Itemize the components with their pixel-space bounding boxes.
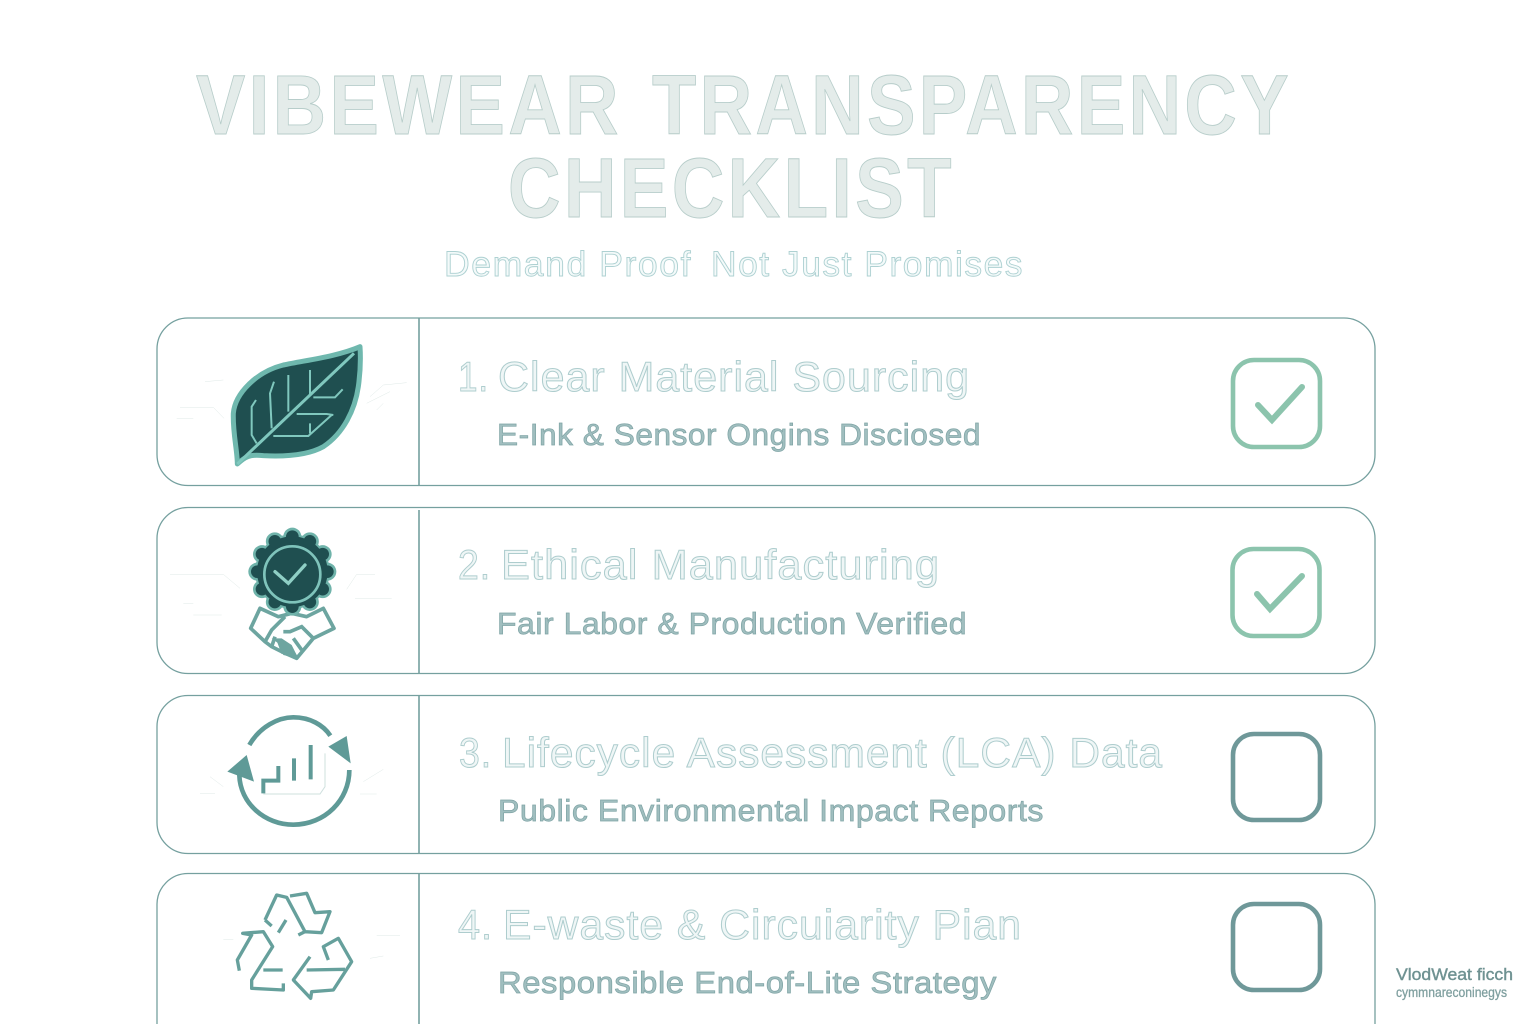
item 4 heading: E-waste & Circuiarity Pian: [503, 901, 1022, 948]
item 2 heading: Ethical Manufacturing: [501, 541, 940, 588]
checkbox: empty: [1233, 734, 1320, 820]
item 1 description: E-Ink & Sensor Ongins Disciosed: [497, 417, 981, 452]
title: [196, 58, 1292, 235]
footer brand note: VlodWeat ficch: [1396, 965, 1513, 984]
panel: item 4 e-waste and circularity: [157, 873, 1375, 1024]
icon: lifecycle chart: [200, 717, 383, 825]
panel: item 1 clear material sourcing: [157, 318, 1375, 486]
title: TRANSPARENCY: [652, 58, 1292, 152]
icon: circuit leaf: [177, 347, 407, 464]
subtitle: Demand Proof: [444, 245, 692, 284]
item 3 description: Public Environmental Impact Reports: [498, 793, 1044, 828]
item 4 heading: 4.: [458, 901, 493, 948]
footer brand note: cymmnareconinegys: [1396, 984, 1507, 1000]
item 1 heading: 1.: [458, 353, 489, 400]
title: VIBEWEAR: [196, 58, 622, 152]
panel: item 3 lifecycle assessment: [157, 695, 1375, 854]
checkbox: empty: [1233, 904, 1320, 990]
item 3 heading: Lifecycle Assessment (LCA) Data: [502, 729, 1163, 776]
checkbox: checked: [1233, 360, 1320, 447]
item 1 heading: Clear Material Sourcing: [498, 353, 970, 400]
checkbox: checked: [1232, 549, 1320, 636]
item 2 description: Fair Labor & Production Verified: [497, 606, 967, 641]
title: CHECKLIST: [508, 141, 955, 235]
item 2 heading: 2.: [458, 541, 491, 588]
icon: recycle arrows: [223, 893, 400, 998]
item 4 description: Responsible End-of-Lite Strategy: [498, 965, 997, 1000]
icon: verified badge with handshake: [170, 528, 392, 658]
subtitle: Not Just Promises: [711, 245, 1024, 284]
footer brand note: [1396, 965, 1513, 1000]
panel: item 2 ethical manufacturing: [157, 508, 1375, 674]
subtitle: [444, 245, 1024, 284]
item 3 heading: 3.: [459, 729, 492, 776]
